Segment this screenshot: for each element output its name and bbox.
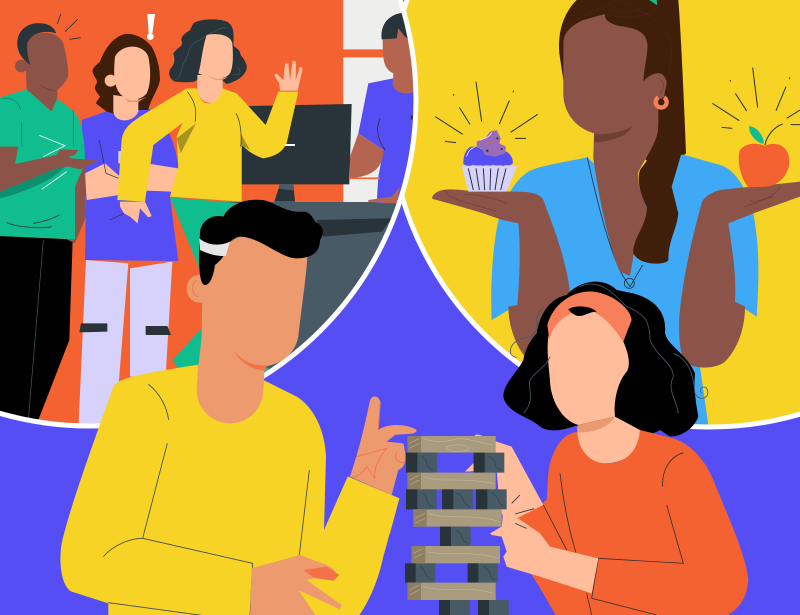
panel: office team scene <box>0 0 423 433</box>
block row 2 <box>406 453 504 473</box>
left circle outline <box>0 0 416 426</box>
sweater <box>503 430 748 615</box>
hand crease lines <box>445 187 780 212</box>
person: man in green shirt <box>0 14 98 433</box>
sweater seams <box>103 384 309 615</box>
person: woman in orange sweater playing jenga <box>465 282 748 615</box>
hair tie <box>649 0 657 5</box>
ear <box>187 275 203 303</box>
exclamation mark <box>147 14 155 40</box>
icon: cupcake <box>462 130 517 192</box>
finger tension lines <box>512 495 534 528</box>
icon: apple <box>739 124 789 187</box>
block row 8 <box>405 563 498 583</box>
lower hand <box>250 555 342 615</box>
block row 7 <box>412 546 500 563</box>
inner ear <box>658 78 664 93</box>
sleeve seams <box>543 453 683 615</box>
blue top <box>491 154 758 425</box>
earring <box>656 97 667 108</box>
hair wisps <box>510 284 708 413</box>
right arm and hand <box>679 182 800 368</box>
block row 1 <box>408 436 496 453</box>
neck <box>197 362 265 423</box>
jenga tower <box>405 436 509 615</box>
neck shadow <box>594 125 632 142</box>
hair strand dots <box>563 0 672 75</box>
neck <box>577 417 640 463</box>
block row 9 <box>408 583 496 600</box>
collar line <box>587 157 643 287</box>
person: woman in yellow sweater <box>117 19 303 223</box>
smile <box>233 349 267 371</box>
person: woman in purple tee <box>78 34 178 430</box>
right circle outline <box>389 0 800 427</box>
head <box>198 237 307 367</box>
lower hand <box>490 512 598 593</box>
block row 4 <box>406 489 507 509</box>
person: man in yellow sweater playing jenga <box>60 200 399 615</box>
front hair lock <box>633 67 686 264</box>
block row 5 <box>413 509 502 527</box>
man's upper hand <box>348 396 417 533</box>
back hair <box>559 0 686 173</box>
cupcake sparkle rays <box>435 82 538 143</box>
block row 10 <box>439 600 509 615</box>
headband <box>199 238 230 256</box>
apple sparkle rays <box>712 68 800 128</box>
office wall <box>343 0 402 202</box>
wood grain <box>409 438 500 595</box>
block row 6 <box>440 527 471 546</box>
fingertip <box>303 567 339 581</box>
left arm and hand <box>432 189 570 357</box>
person: man in purple shirt at desk <box>350 13 414 204</box>
sweater <box>60 365 399 615</box>
face <box>548 308 629 425</box>
neck shadow <box>577 417 615 432</box>
hair <box>503 282 698 437</box>
panel: woman choosing between cupcake and apple <box>389 0 800 427</box>
face and neck <box>563 14 667 276</box>
hair <box>199 200 323 285</box>
upper arm and fingers <box>465 435 543 523</box>
monitor <box>242 104 352 202</box>
desk <box>202 202 396 373</box>
green trousers <box>170 197 242 270</box>
block row 3 <box>408 473 496 489</box>
headband <box>547 292 632 342</box>
cuff <box>348 477 399 533</box>
hand lines <box>352 403 405 478</box>
slate grain <box>420 457 505 580</box>
